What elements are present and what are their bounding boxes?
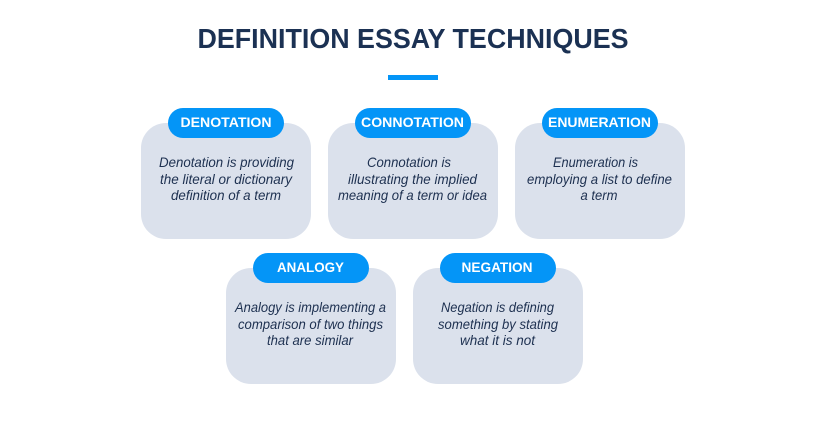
- text: denotation description: the literal or dictionary: [160, 171, 293, 187]
- text: analogy description: [234, 299, 386, 348]
- label pill: analogy: [253, 253, 369, 283]
- text: analogy description: comparison of two things: [238, 316, 383, 332]
- label pill: denotation: [168, 108, 284, 138]
- label pill: analogy: ANALOGY: [277, 259, 345, 275]
- text: negation description: what it is not: [460, 332, 536, 348]
- text: connotation description: [338, 154, 487, 203]
- text: connotation description: Connotation is: [367, 154, 451, 170]
- label pill: denotation: DENOTATION: [180, 114, 272, 130]
- text: connotation description: meaning of a term or idea: [338, 187, 487, 203]
- text: analogy description: Analogy is implementing a: [234, 299, 386, 315]
- panel: denotation: [141, 108, 311, 239]
- text: enumeration description: Enumeration is: [553, 154, 638, 170]
- label pill: enumeration: ENUMERATION: [548, 114, 651, 130]
- title: DEFINITION ESSAY TECHNIQUES: [198, 23, 628, 54]
- text: negation description: something by stating: [438, 316, 558, 332]
- label pill: negation: [440, 253, 556, 283]
- text: enumeration description: a term: [580, 187, 618, 203]
- label pill: enumeration: [542, 108, 658, 138]
- text: enumeration description: [527, 154, 672, 203]
- label pill: connotation: [355, 108, 471, 138]
- text: analogy description: that are similar: [267, 332, 354, 348]
- panel: analogy: [226, 253, 396, 384]
- label pill: negation: NEGATION: [462, 259, 532, 275]
- text: connotation description: illustrating the implied: [348, 171, 478, 187]
- panel: enumeration: [515, 108, 685, 239]
- text: enumeration description: employing a list to define: [527, 171, 672, 187]
- title accent bar: [388, 75, 438, 80]
- text: denotation description: [159, 154, 294, 203]
- text: negation description: [438, 299, 558, 348]
- panel: negation: [413, 253, 583, 384]
- text: denotation description: Denotation is providing: [159, 154, 294, 170]
- text: negation description: Negation is defining: [441, 299, 554, 315]
- text: denotation description: definition of a term: [171, 187, 281, 203]
- label pill: connotation: CONNOTATION: [361, 114, 464, 130]
- panel: connotation: [328, 108, 498, 239]
